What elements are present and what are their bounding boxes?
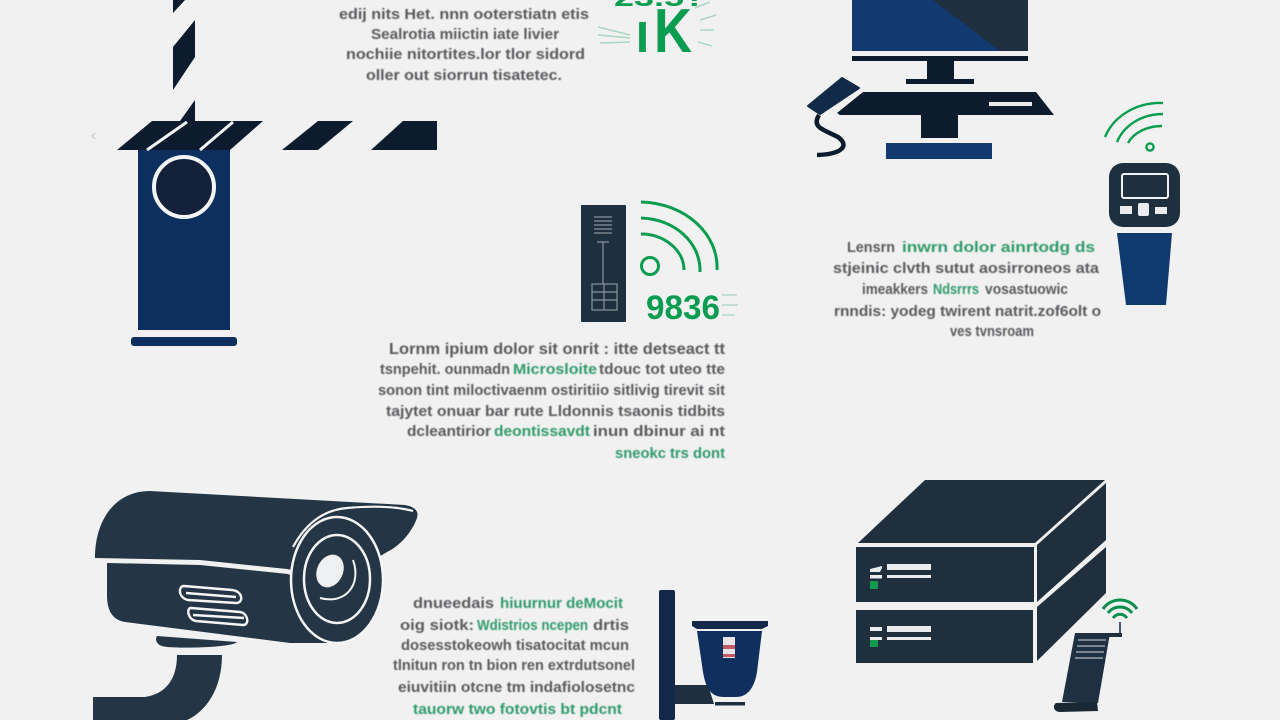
bracket	[675, 685, 714, 704]
kiosk screen	[1122, 174, 1168, 198]
green statistic: 9836: 9836	[646, 289, 720, 327]
vertical striped arm	[173, 0, 195, 121]
small chevron mark: ‹	[91, 127, 96, 144]
icon: bin on wall post	[659, 590, 768, 720]
text block: middle paragraph: tsnpehit. ounmadn	[380, 361, 510, 378]
icon: wall reader device with wifi	[581, 202, 717, 322]
icon: wireless kiosk	[1105, 103, 1180, 305]
text block: middle paragraph: tdouc tot uteo tte	[599, 361, 725, 378]
wifi signal	[1105, 103, 1163, 151]
cup rim	[692, 621, 768, 629]
monitor screen shading	[933, 0, 1028, 51]
camera mount plate	[156, 636, 237, 648]
icon: parking barrier gate	[91, 0, 437, 346]
scanner cable	[817, 115, 843, 155]
text block: right paragraph: stjeinic clvth sutut aosirroneos ata	[833, 260, 1100, 277]
upper server front	[856, 547, 1034, 602]
icon: security camera	[93, 491, 418, 720]
handheld scanner	[808, 78, 859, 114]
reader body	[581, 205, 626, 322]
hood lip highlight	[293, 507, 413, 547]
text block: middle paragraph: tajytet onuar bar rute Lldonnis tsaonis tidbits	[386, 403, 725, 420]
desk	[837, 92, 1054, 138]
horizontal striped arm	[117, 121, 437, 150]
text block: bottom paragraph	[393, 595, 635, 718]
text block: bottom paragraph: hiuurnur deMocit	[500, 595, 623, 612]
text block: bottom paragraph: Wdistrios ncepen	[477, 617, 588, 634]
lower server indicators	[870, 626, 931, 647]
text block: middle paragraph	[378, 341, 726, 462]
cup label	[723, 637, 735, 658]
blue desk base	[886, 143, 992, 159]
wifi arcs	[641, 202, 717, 274]
text block: bottom paragraph: dnueedais	[413, 595, 494, 612]
text block: middle paragraph: sonon tint miloctivaenm ostiritiio sitlivig tirevit sit	[378, 382, 725, 399]
barrier post base	[131, 337, 237, 346]
upper server indicators	[870, 564, 931, 589]
bracket foot	[715, 702, 745, 706]
text block: top paragraph: nochiie nitortites.lor tlor sidord	[346, 46, 585, 63]
post	[659, 590, 675, 720]
reader detail	[592, 217, 617, 310]
text block: right paragraph	[833, 239, 1101, 340]
camera lens ring	[304, 535, 370, 623]
text block: right paragraph: imeakkers	[862, 281, 928, 298]
lower server right side	[1037, 547, 1106, 661]
text block: top paragraph: edij nits Het. nnn ooterstiatn etis	[339, 6, 589, 23]
text block: right paragraph: Lensrn	[847, 239, 895, 256]
text block: right paragraph: inwrn dolor ainrtodg ds	[902, 239, 1095, 256]
text block: middle paragraph: deontissavdt	[494, 423, 590, 440]
green statistic: top	[598, 0, 716, 66]
cup bowl	[697, 631, 762, 697]
green statistic: top: I	[636, 13, 649, 62]
text block: right paragraph: ves tvnsroam	[950, 323, 1034, 340]
camera lens centre	[311, 550, 349, 592]
monitor bezel, neck and foot	[852, 56, 1028, 84]
text block: middle paragraph: sneokc trs dont	[615, 445, 725, 462]
kiosk buttons	[1120, 203, 1167, 216]
icon: server stack	[856, 480, 1137, 712]
camera lens arc	[320, 560, 355, 599]
text block: bottom paragraph: oig siotk:	[400, 617, 474, 634]
camera lens housing	[291, 517, 383, 643]
kiosk head	[1109, 163, 1180, 227]
text block: top paragraph: oller out siorrun tisatetec.	[366, 67, 562, 84]
text block: middle paragraph: Lornm ipium dolor sit onrit : itte detseact tt	[389, 341, 726, 358]
monitor screen	[852, 0, 1028, 51]
text block: top paragraph	[339, 6, 589, 84]
barrier sensor circle	[154, 157, 214, 217]
text block: bottom paragraph: eiuvitiin otcne tm indafiolosetnc	[398, 679, 635, 696]
lower server front	[856, 610, 1033, 663]
text block: right paragraph: Ndsrrrs	[933, 281, 979, 298]
kiosk stand	[1117, 233, 1172, 305]
text block: top paragraph: Sealrotia miictin iate livier	[371, 26, 559, 43]
text block: bottom paragraph: dosesstokeowh tisatocitat mcun	[401, 637, 629, 654]
camera body	[107, 563, 345, 643]
text block: middle paragraph: Microsloite	[513, 361, 597, 378]
text block: bottom paragraph: drtis	[593, 617, 629, 634]
camera vent	[180, 586, 247, 625]
handheld terminal	[1054, 622, 1122, 712]
camera hood	[95, 491, 418, 580]
upper server right side	[1037, 483, 1106, 602]
text block: right paragraph: rnndis: yodeg twirent natrit.zof6olt o	[834, 303, 1101, 320]
barrier post	[138, 150, 230, 330]
terminal wifi signal	[1103, 600, 1137, 618]
text block: right paragraph: vosastuowic	[985, 281, 1068, 298]
camera arm	[93, 655, 222, 720]
text block: middle paragraph: dcleantirior	[407, 423, 491, 440]
server top face	[858, 480, 1105, 543]
text block: bottom paragraph: tlnitun ron tn bion ren extrdutsonel	[393, 657, 635, 674]
text block: bottom paragraph: tauorw two fotovtis bt pdcnt	[413, 701, 622, 718]
icon: computer workstation	[808, 0, 1054, 159]
text block: middle paragraph: inun dbinur ai nt	[593, 423, 725, 440]
desk slot	[989, 102, 1032, 106]
